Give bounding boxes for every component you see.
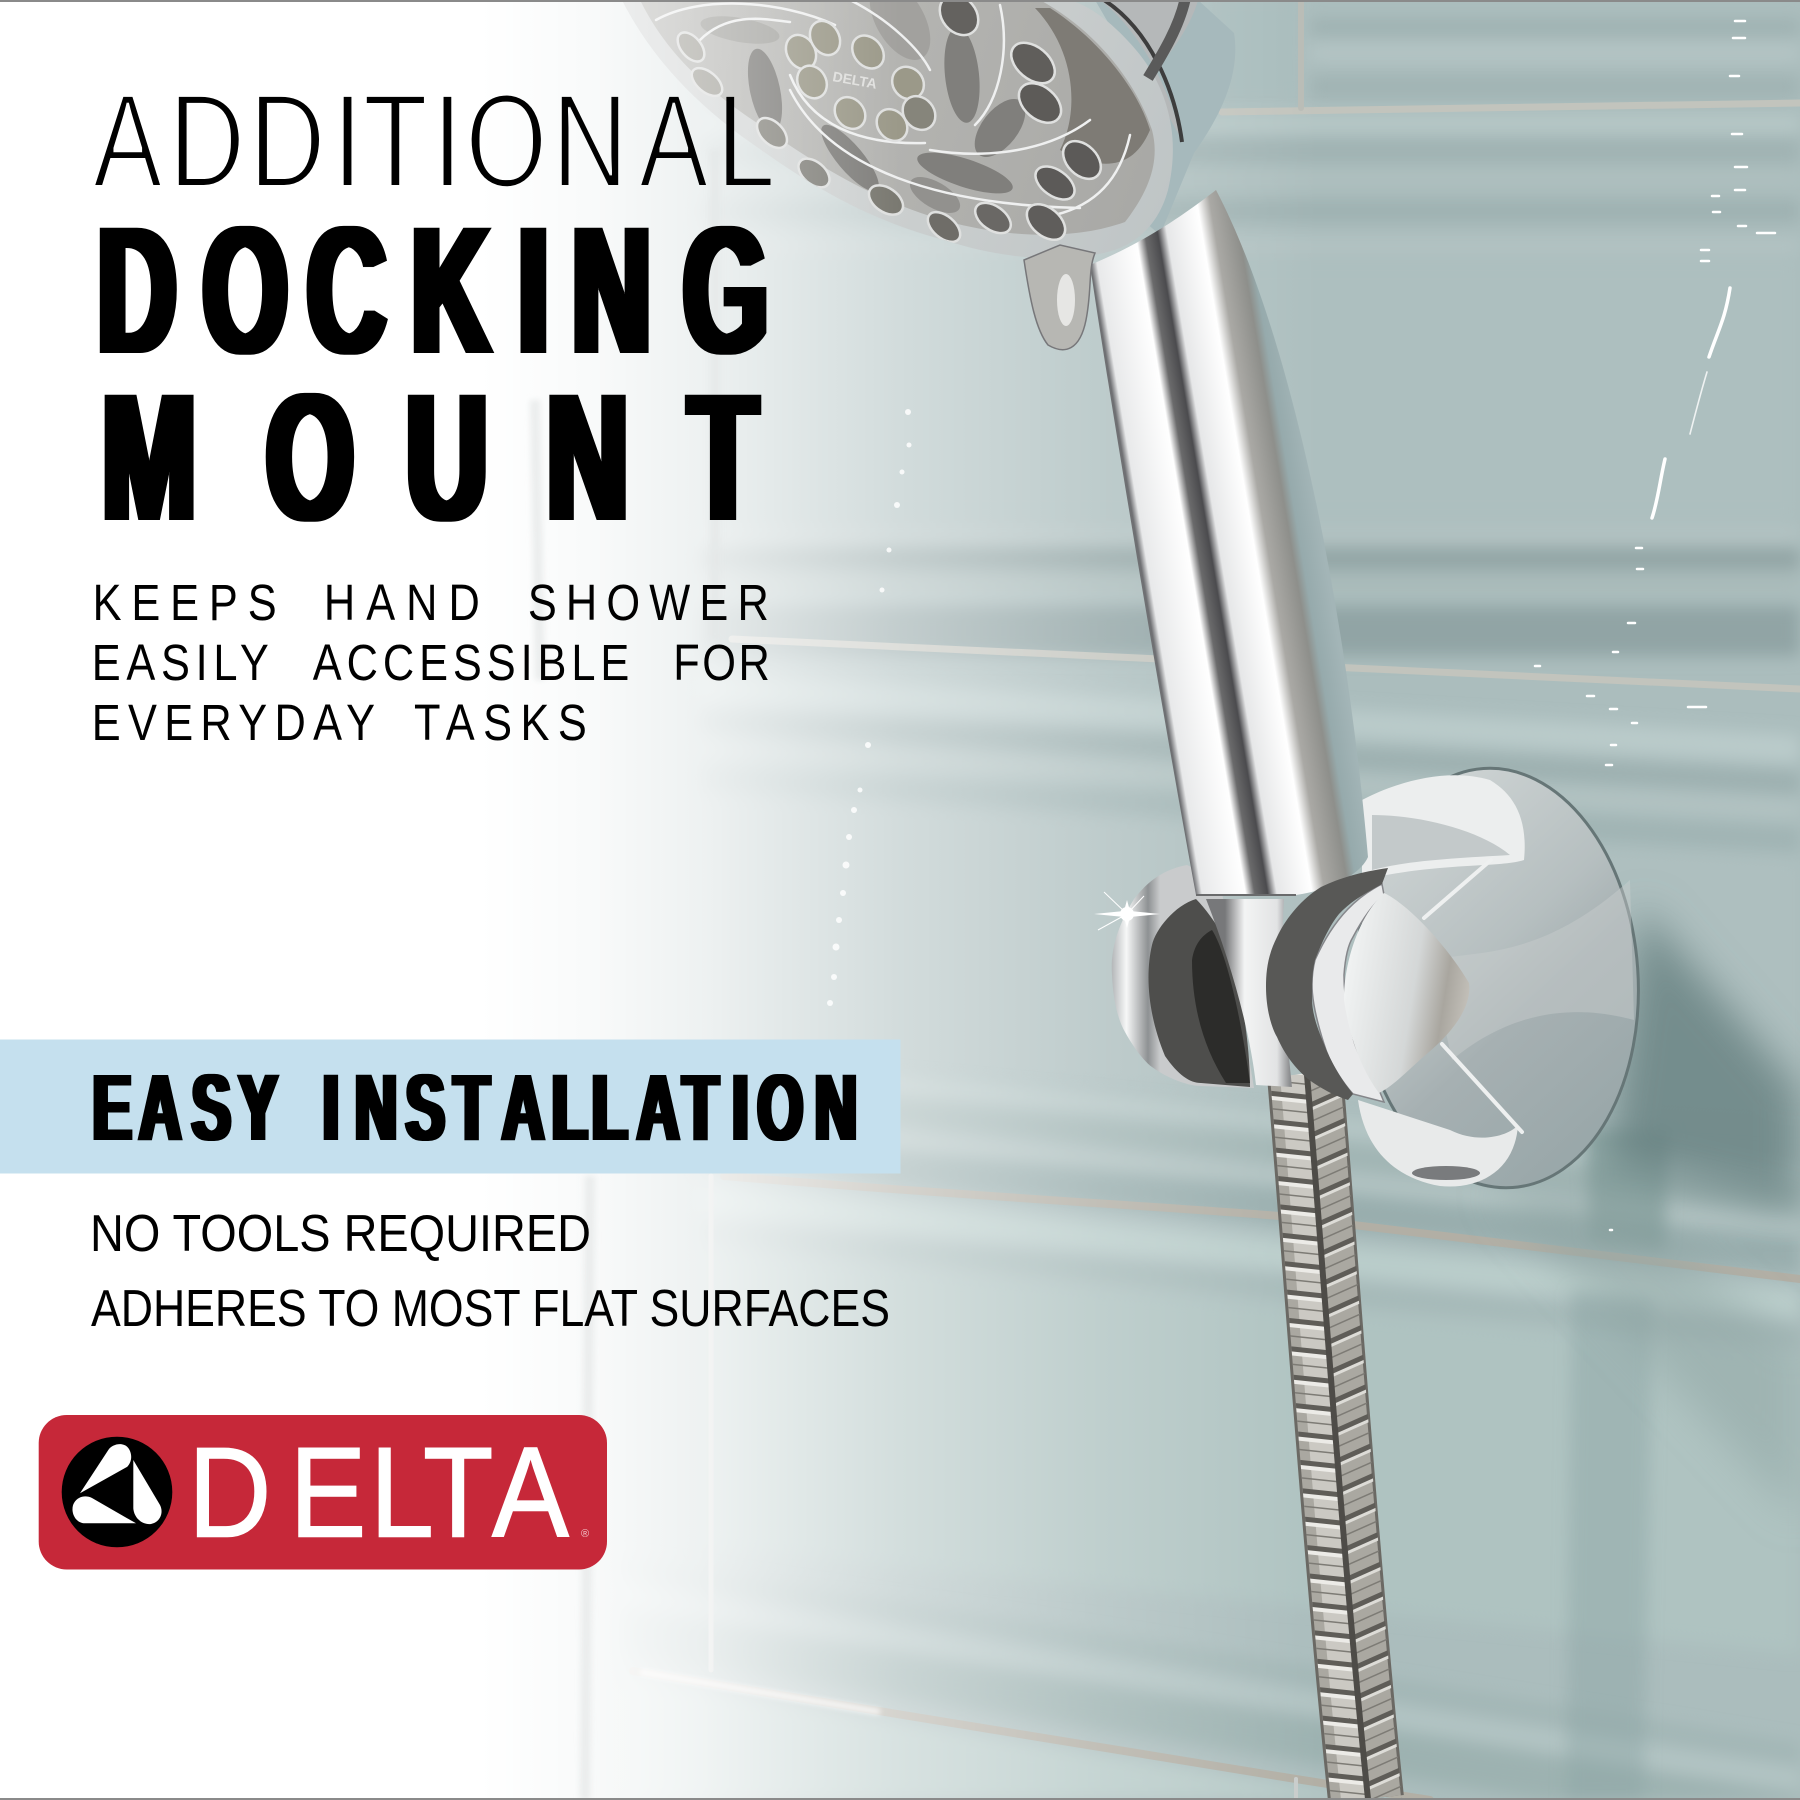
handle seam at bracket	[1196, 894, 1296, 896]
grout lines	[633, 0, 1800, 1800]
left dark grip band	[1148, 899, 1250, 1087]
water running down lower tiles	[1566, 1130, 1669, 1800]
lower dark reflection	[1412, 1166, 1480, 1180]
banner heading: EASY INSTALLATION	[93, 1055, 857, 1160]
triangle petal: right	[133, 1460, 162, 1524]
water droplet trail	[827, 409, 912, 1006]
photo: docking mount	[1024, 190, 1652, 1197]
cradle neck	[1206, 899, 1292, 1087]
title line: MOUNT: MOUNT	[102, 357, 758, 560]
feature: no tools: NO TOOLS REQUIRED	[90, 1205, 591, 1263]
rear collar of shower head	[1095, 0, 1235, 235]
description line 1: HAND	[324, 575, 491, 632]
badge background	[39, 1415, 607, 1570]
lower mount highlight	[1358, 1100, 1518, 1186]
faint left tile edges	[535, 150, 880, 1800]
hook inner highlight	[1057, 274, 1075, 326]
upper reflection	[1372, 815, 1510, 870]
tile bevel bands upper row	[1210, 0, 1800, 100]
logo mark	[62, 1437, 172, 1547]
photo: hand shower head	[600, 0, 1235, 260]
hose left highlight	[1293, 1075, 1354, 1799]
plate reflection lines	[1424, 860, 1522, 1132]
top edge line	[0, 0, 1800, 2]
dark collar band	[1148, 0, 1185, 78]
hose dark seam	[1307, 1075, 1368, 1799]
bracket cast shadow on wall	[1490, 905, 1800, 1520]
tile bevel bands second row	[700, 116, 1800, 656]
left chrome ring	[1112, 865, 1254, 1088]
hose right ribs	[1324, 1075, 1385, 1799]
logo wordmark: DELTA	[188, 1421, 569, 1564]
right chrome ring	[1312, 884, 1384, 1102]
hose outline	[1305, 1075, 1366, 1799]
photo: flexible hose	[1288, 1075, 1385, 1799]
triangle petal: lower	[72, 1496, 136, 1523]
water highlights on right tiles	[1535, 21, 1775, 1230]
black circle	[62, 1437, 172, 1547]
Delta logo badge	[39, 1415, 607, 1570]
adjuster knob	[1344, 893, 1469, 1093]
description line 2: ACCESSIBLE	[313, 635, 634, 692]
dark collar arcs	[1104, 0, 1182, 142]
registered mark: ®	[581, 1528, 589, 1540]
description line 2: FOR	[673, 635, 772, 692]
right dark grip band	[1266, 868, 1388, 1100]
tile fourth row	[700, 1184, 1800, 1654]
swirl highlights	[656, 0, 1130, 215]
head body rim	[622, 0, 1173, 258]
hose left ribs	[1288, 1075, 1349, 1799]
banner background	[0, 1040, 900, 1174]
description line 3: TASKS	[414, 695, 595, 752]
description line 1: SHOWER	[528, 575, 778, 632]
plate diagonal reflection	[1430, 880, 1634, 1060]
dark reflection	[1035, 8, 1150, 164]
collar silver ring	[1100, 0, 1198, 140]
description text	[92, 575, 778, 752]
spray face	[623, 2, 1155, 243]
upper mount highlight	[1362, 775, 1525, 880]
hook on handle	[1024, 245, 1095, 350]
swirl petals	[699, 0, 1035, 220]
description line 1: KEEPS	[93, 575, 286, 632]
triangle petal: upper	[80, 1444, 131, 1493]
tile bottom bevel third row	[700, 1058, 1800, 1274]
handle shaft	[1090, 190, 1368, 895]
description line 2: EASILY	[92, 635, 275, 692]
title	[93, 67, 775, 560]
easy installation banner	[0, 1040, 900, 1174]
head left fade	[623, 2, 864, 187]
feature: adheres: ADHERES TO MOST FLAT SURFACES	[91, 1280, 890, 1338]
brand mark on spray face: DELTA	[831, 68, 878, 92]
bottom edge line	[0, 1798, 1800, 1800]
hose body	[1305, 1075, 1366, 1799]
tile bottom bevel fourth row	[620, 1558, 1800, 1800]
wall plate	[1344, 759, 1652, 1197]
sparkle	[1094, 892, 1160, 930]
tile bevel bands third row	[700, 673, 1800, 1120]
title line: ADDITIONAL: ADDITIONAL	[93, 67, 775, 216]
spray nozzles	[672, 0, 1108, 248]
description line 3: EVERYDAY	[92, 695, 382, 752]
title line: DOCKING: DOCKING	[97, 188, 768, 392]
feature list	[90, 1205, 890, 1338]
left grip inner shadow	[1192, 930, 1250, 1083]
